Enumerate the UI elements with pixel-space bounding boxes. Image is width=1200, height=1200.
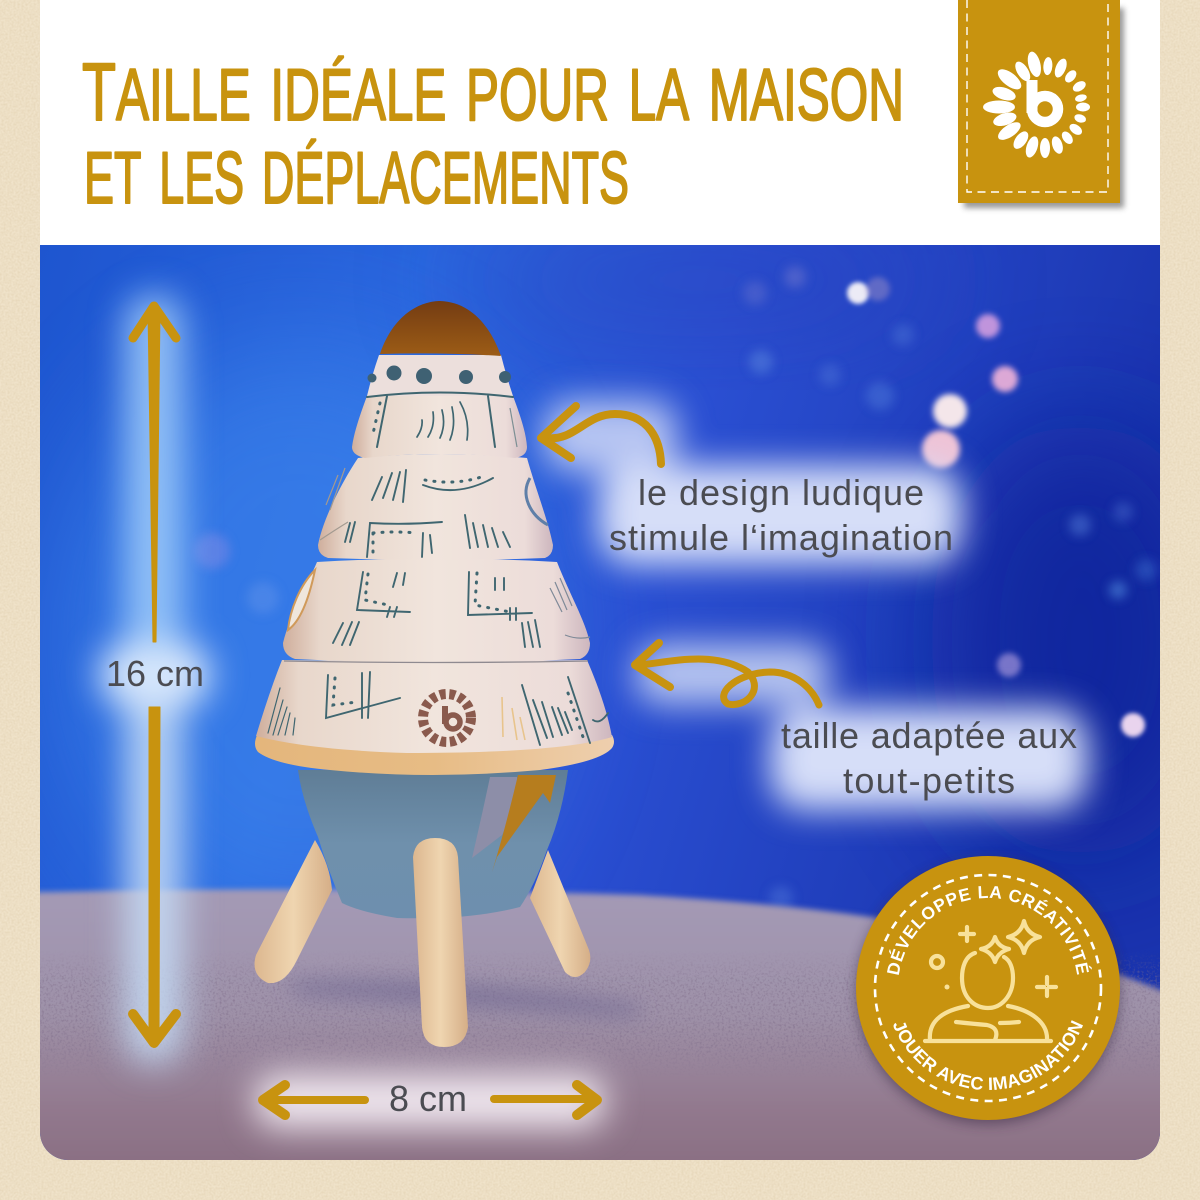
tier 1 (352, 396, 527, 458)
faint orange lines (502, 697, 525, 740)
side decoration rings (288, 408, 590, 638)
text: design label (609, 472, 953, 558)
title: et les déplacements (84, 110, 629, 226)
tier 2 (318, 454, 553, 560)
badge bottom text: JOUER AVEC IMAGINATION (894, 1020, 1083, 1090)
text glows (100, 294, 1088, 1128)
badge (850, 854, 1126, 1130)
photo panel (40, 245, 1160, 1160)
measurement: width arrows (263, 1085, 597, 1115)
ground (40, 886, 1160, 1160)
icon: small dot (944, 984, 950, 990)
label: 8 cm: 8 cm (389, 1078, 467, 1119)
text: size label: tout-petits (843, 760, 1015, 801)
pattern lines (268, 392, 608, 745)
porthole dots (368, 366, 511, 384)
bokeh lights (194, 266, 1157, 910)
pattern dots (333, 403, 583, 737)
sky backdrop (40, 230, 1200, 1160)
text: size label (781, 715, 1077, 801)
curly arrow to size (635, 643, 819, 705)
header panel (40, 0, 1160, 245)
tier 4 with rim (255, 660, 614, 775)
dome (380, 301, 501, 356)
measurement: height arrow (133, 306, 176, 1043)
text: design label: stimule l‘imagination (609, 517, 953, 558)
front leg (413, 838, 468, 1047)
rocket cast shadow (285, 981, 642, 1016)
tier seam (284, 661, 588, 662)
icon: meditating figure with stars (925, 921, 1057, 1041)
text: size label: taille adaptée aux (781, 715, 1077, 756)
rocket (254, 301, 614, 1047)
band (367, 355, 513, 396)
icon: brown logo on rocket (423, 694, 471, 742)
text: design label: le design ludique (638, 472, 924, 513)
badge top text: DÉVELOPPE LA CRÉATIVITÉ (887, 886, 1092, 975)
icon: logo flower (983, 50, 1090, 159)
blue body (298, 770, 568, 918)
icon: logo letter b (1032, 80, 1058, 122)
grey and orange fins (472, 775, 556, 872)
brand tag with logo (958, 0, 1124, 208)
label: 16 cm: 16 cm (106, 653, 204, 694)
curly arrow to design (541, 406, 661, 464)
title (82, 27, 904, 226)
back legs (254, 840, 590, 983)
tier 3 (283, 558, 590, 662)
